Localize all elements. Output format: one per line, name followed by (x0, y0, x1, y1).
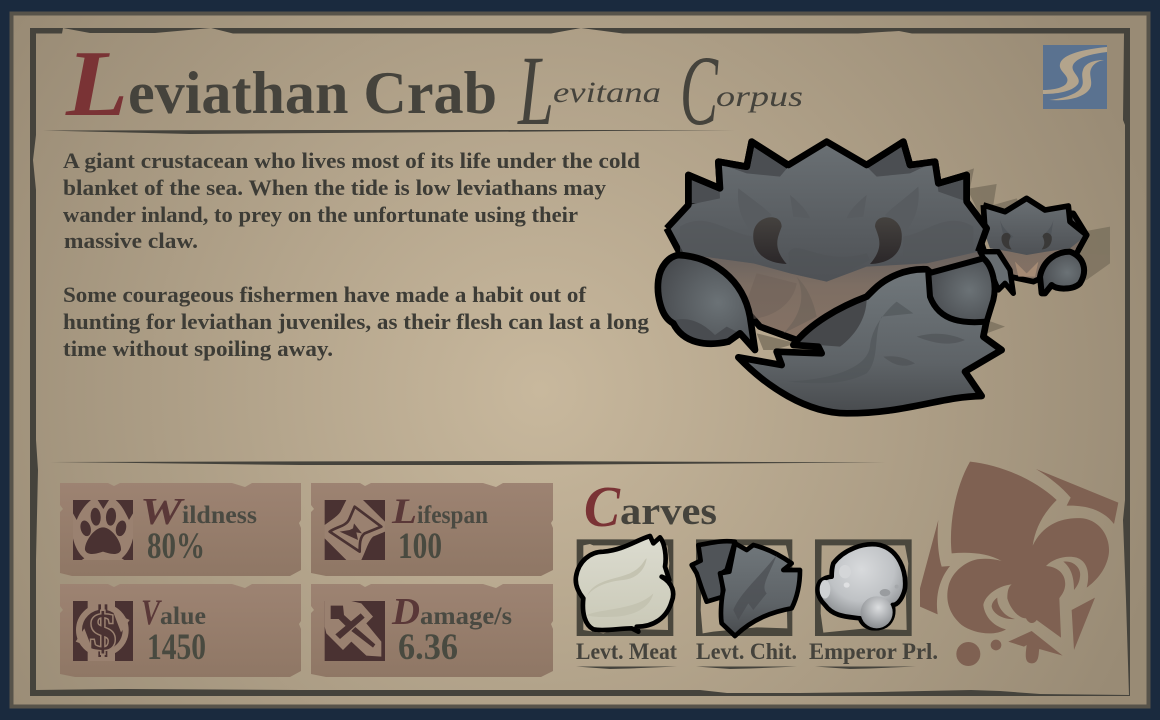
title: L (65, 32, 128, 136)
stat panel: value: alue (160, 603, 206, 630)
damage label: D (391, 591, 420, 633)
scientific name: evitana (553, 76, 661, 109)
wildness label: W (140, 491, 186, 533)
big claw (738, 269, 1002, 413)
description text: massive claw. (64, 228, 198, 253)
stat panel: damage: 6.36 (398, 627, 458, 668)
stat panel: wildness (60, 483, 301, 576)
description text: wander inland, to prey on the unfortunate using their (63, 202, 578, 227)
title (65, 32, 497, 136)
icon: paw (73, 500, 133, 560)
stat panel: lifespan (311, 483, 553, 576)
scientific name: C (680, 35, 719, 146)
icon: coin: $ (89, 601, 116, 661)
logo (1043, 45, 1107, 109)
small crab (983, 198, 1087, 293)
carve item: chitin (692, 539, 800, 636)
description text: hunting for leviathan juveniles, as their flesh can last a long (63, 309, 649, 334)
description text (63, 148, 649, 361)
carve item: meat (576, 536, 673, 636)
carve item: pearl (815, 539, 912, 636)
stat panel: wildness: 80% (147, 526, 205, 567)
carves heading: arves (620, 490, 717, 533)
lifespan label: L (391, 491, 417, 531)
crab body (667, 142, 987, 340)
value label: V (141, 592, 162, 632)
carves heading: C (584, 474, 621, 539)
carve label: chitin: Levt. Chit. (696, 639, 797, 664)
description text: Some courageous fishermen have made a habit out of (63, 282, 587, 307)
stat panel: damage (311, 584, 553, 677)
description text: time without spoiling away. (63, 336, 333, 361)
stat panel: lifespan: 100 (398, 526, 442, 567)
crab illustration (658, 142, 1110, 413)
stat panel: value (60, 584, 301, 677)
title: eviathan Crab (128, 60, 497, 126)
crab shadow (757, 168, 1110, 350)
fleur-de-lis emblem (920, 462, 1118, 666)
description text: blanket of the sea. When the tide is low leviathans may (63, 175, 606, 200)
icon: sword (325, 601, 385, 661)
icon: hourglass (325, 500, 385, 560)
lower rule (50, 461, 885, 465)
stat panel: damage: amage/s (420, 603, 512, 630)
scientific name: orpus (716, 80, 803, 113)
carve label: meat: Levt. Meat (576, 639, 677, 664)
description text: A giant crustacean who lives most of its life under the cold (63, 148, 640, 173)
left claw (658, 255, 755, 350)
stat panel: lifespan: ifespan (417, 502, 488, 529)
claw arm (928, 258, 995, 322)
header rule (43, 130, 735, 134)
icon: coin (73, 601, 133, 661)
body back spikes (688, 142, 967, 207)
scientific name (517, 35, 803, 146)
stat panel: wildness: ildness (182, 502, 257, 529)
arm connector (980, 252, 1013, 293)
carve label: pearl: Emperor Prl. (809, 639, 938, 664)
crab eyes (753, 217, 787, 264)
carves heading (584, 474, 717, 539)
stat panel: value: 1450 (147, 627, 206, 668)
scientific name: L (517, 35, 554, 146)
body shell (667, 142, 987, 282)
